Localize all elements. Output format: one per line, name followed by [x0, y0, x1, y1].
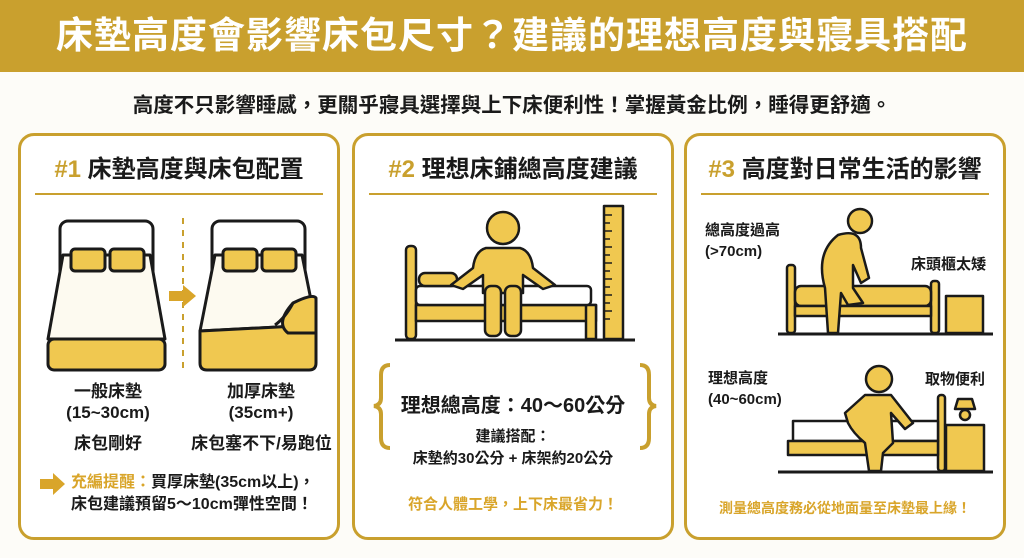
tip text: 床包建議預留5～10cm彈性空間！ — [71, 496, 313, 513]
footer note: 測量總高度務必從地面量至床墊最上緣！ — [719, 500, 971, 516]
panel: #2 ideal total height — [352, 133, 674, 540]
panel 1 heading: #1 床墊高度與床包配置 — [54, 156, 304, 183]
illustration: person sitting on bed with ruler — [374, 204, 656, 450]
tip text — [71, 473, 315, 513]
label: too high — [705, 222, 780, 260]
label: nightstand too low: 床頭櫃太矮 — [911, 256, 986, 273]
label: too high: 總高度過高 — [705, 222, 780, 239]
tip text: 充編提醒：買厚床墊(35cm以上)， — [71, 474, 315, 491]
panel: #3 daily life effect — [684, 133, 1006, 540]
panel: #1 mattress height and fitted sheet: 床包剛好 — [74, 434, 142, 453]
label: ideal height — [708, 370, 782, 408]
label: regular mattress: 一般床墊 — [74, 382, 142, 401]
ideal height text: 理想總高度：40～60公分 — [401, 395, 625, 417]
panel 3 heading: #3 高度對日常生活的影響 — [708, 156, 982, 183]
panel: #1 mattress height and fitted sheet: 床包塞不下/易跑位 — [191, 434, 332, 453]
label: regular mattress — [66, 382, 150, 422]
title banner: 床墊高度會影響床包尺寸？建議的理想高度與寢具搭配 — [56, 15, 968, 56]
subtitle: 高度不只影響睡感，更關乎寢具選擇與上下床便利性！掌握黃金比例，睡得更舒適。 — [133, 94, 891, 117]
illustration: too-high bed and ideal bed scenes — [778, 208, 993, 474]
label: ideal height: (40~60cm) — [708, 391, 782, 408]
illustration: two beds comparison — [40, 218, 318, 495]
title banner — [0, 0, 1024, 72]
label: ideal height: 理想高度 — [708, 370, 768, 387]
footer note: 符合人體工學，上下床最省力！ — [408, 496, 618, 513]
recommended combination: 建議搭配： — [475, 428, 550, 445]
label: too high: (>70cm) — [705, 243, 762, 260]
label: thick mattress — [227, 382, 295, 422]
label: thick mattress: 加厚床墊 — [227, 382, 295, 401]
recommended combination: 床墊約30公分 + 床架約20公分 — [413, 450, 613, 467]
label: thick mattress: (35cm+) — [229, 403, 293, 422]
recommended combination — [413, 428, 613, 467]
panel 2 heading: #2 理想床鋪總高度建議 — [388, 156, 638, 183]
label: easy reach: 取物便利 — [925, 371, 985, 388]
label: regular mattress: (15~30cm) — [66, 403, 150, 422]
panel: #1 mattress height and fitted sheet — [18, 133, 340, 540]
